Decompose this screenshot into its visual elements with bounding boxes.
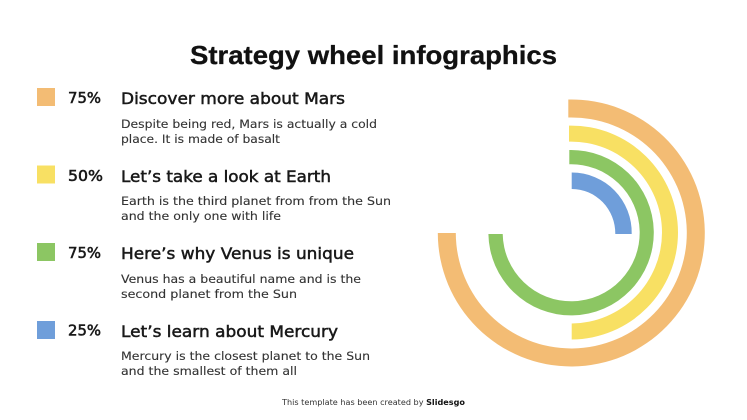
ring: Mars 75% xyxy=(438,99,705,366)
ring: Earth 50% xyxy=(569,126,678,340)
ring: Mercury 25% xyxy=(572,172,632,234)
percentage: 75%: 75% xyxy=(68,89,101,107)
percentage: 25%: 25% xyxy=(68,322,101,340)
description: Earth xyxy=(121,194,391,223)
legend item: Earth xyxy=(37,166,391,223)
description: Mercury: Mercury is the closest planet to the Sun xyxy=(121,349,370,363)
description: Mercury: and the smallest of them all xyxy=(121,364,297,378)
description: Mercury xyxy=(121,349,370,378)
heading: Venus: Here’s why Venus is unique xyxy=(121,244,354,263)
legend item: Mars xyxy=(37,88,377,146)
heading: Earth: Let’s take a look at Earth xyxy=(121,167,331,186)
heading: Mercury: Let’s learn about Mercury xyxy=(121,322,338,341)
description: Venus: Venus has a beautiful name and is the xyxy=(121,272,361,286)
icon: green square xyxy=(37,243,55,261)
footer credit: This template has been created by Slidesgo xyxy=(281,398,465,407)
legend item: Venus xyxy=(37,243,361,301)
strategy wheel chart xyxy=(438,99,705,366)
description: Venus xyxy=(121,272,361,301)
description: Mars xyxy=(121,117,377,146)
description: Earth: Earth is the third planet from from the Sun xyxy=(121,194,391,208)
heading: Mars: Discover more about Mars xyxy=(121,89,345,108)
ring: Venus 75% xyxy=(488,150,654,315)
icon: blue square xyxy=(37,321,55,339)
icon: yellow square xyxy=(37,166,55,184)
description: Venus: second planet from the Sun xyxy=(121,287,297,301)
description: Mars: place. It is made of basalt xyxy=(121,132,281,146)
icon: orange square xyxy=(37,88,55,106)
title: Strategy wheel infographics xyxy=(190,40,557,70)
description: Earth: and the only one with life xyxy=(121,209,281,223)
description: Mars: Despite being red, Mars is actually a cold xyxy=(121,117,377,131)
percentage: 75%: 75% xyxy=(68,244,101,262)
percentage: 50%: 50% xyxy=(68,167,103,185)
legend item: Mercury xyxy=(37,321,370,378)
